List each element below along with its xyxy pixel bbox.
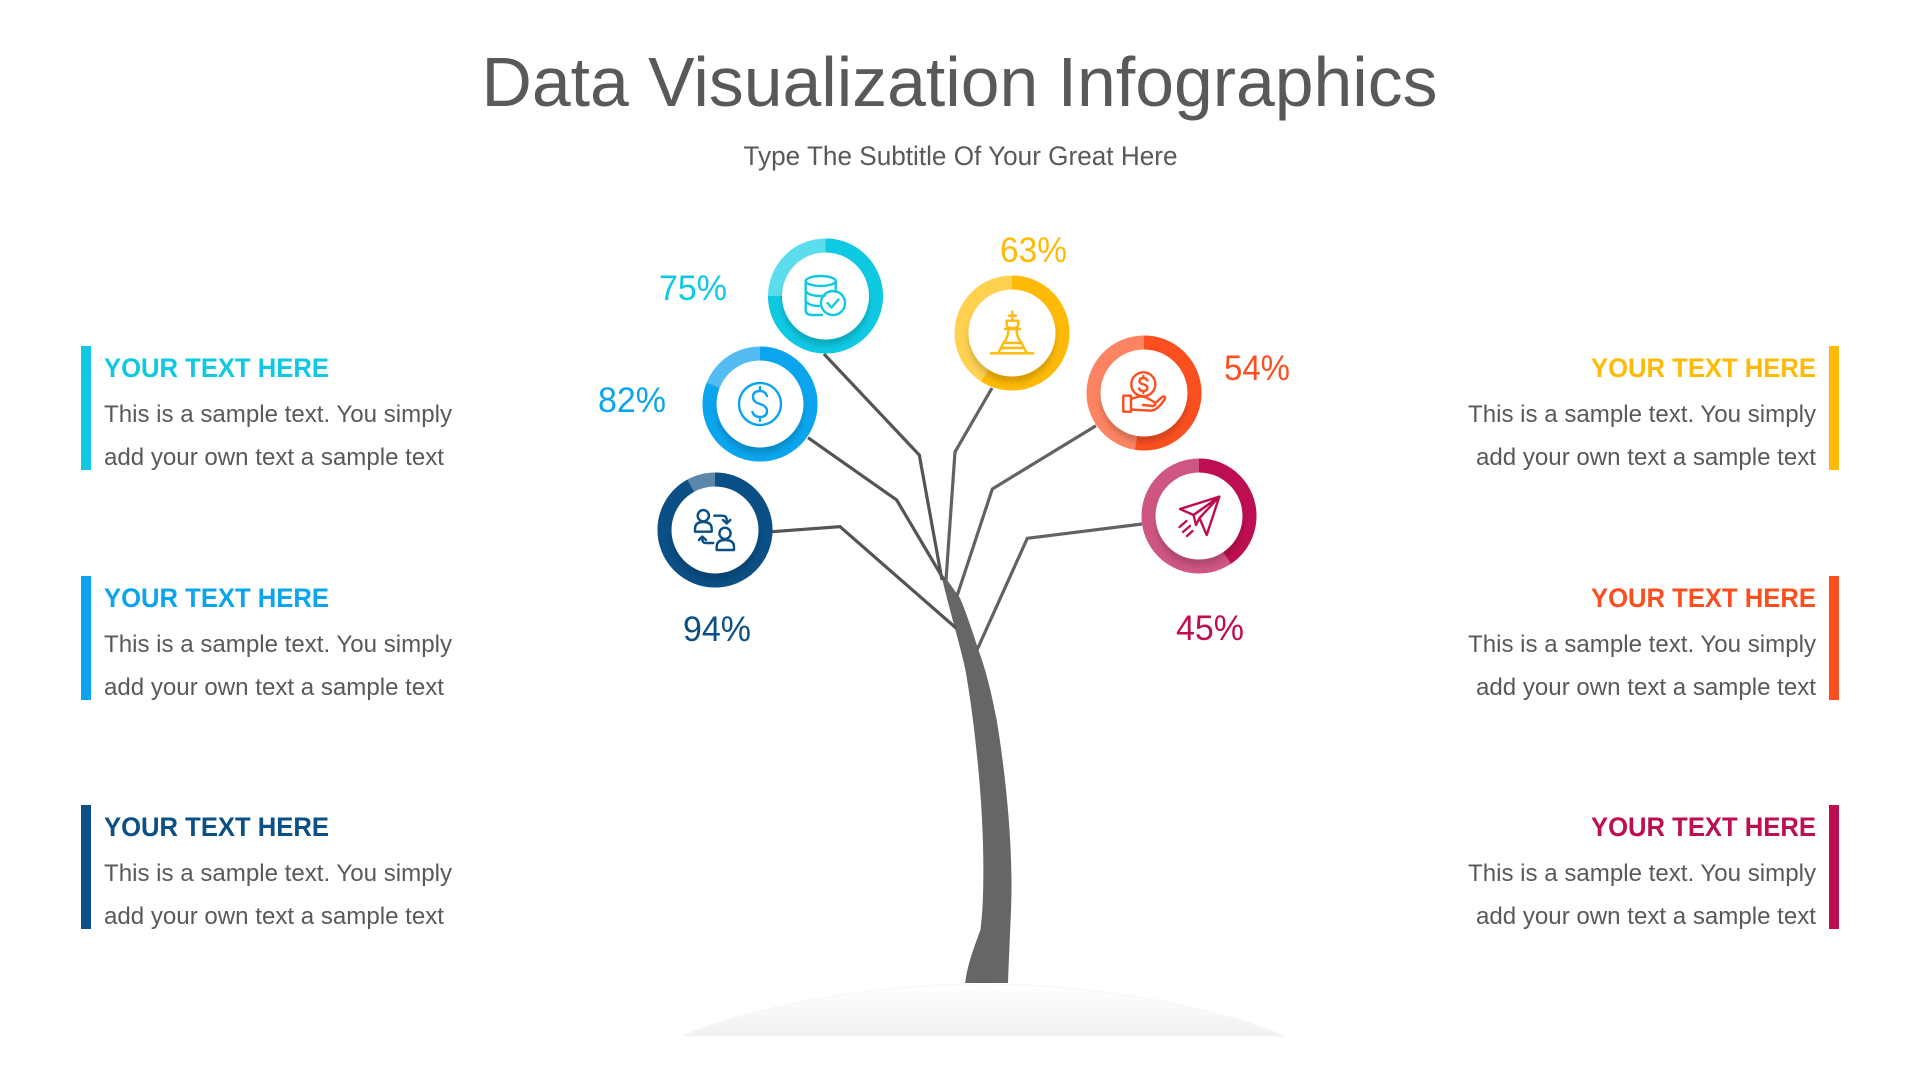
panel: left text block 2: This is a sample text. You simply (104, 631, 452, 658)
label: 63%: 63% (1000, 231, 1067, 270)
panel: right text block 1: This is a sample text. You simply (1468, 401, 1816, 428)
panel: right text block 2 (1468, 576, 1839, 701)
label: 94%: 94% (683, 610, 751, 649)
tree trunk (941, 574, 1012, 983)
panel: right text block 2: YOUR TEXT HERE (1591, 583, 1816, 613)
donut: 94% navy (665, 480, 765, 580)
icon: people exchange (695, 510, 734, 550)
panel: left text block 2: YOUR TEXT HERE (104, 583, 329, 613)
panel: left text block 3: YOUR TEXT HERE (104, 812, 329, 842)
panel: right text block 3: This is a sample text. You simply (1468, 860, 1816, 887)
donut: 54% orange (1094, 343, 1194, 443)
icon: paper plane (1180, 497, 1219, 536)
panel: right text block 1: YOUR TEXT HERE (1591, 353, 1816, 383)
panel: left text block 1: YOUR TEXT HERE (104, 353, 329, 383)
panel: right text block 3 (1468, 805, 1839, 930)
panel: left text block 3 (81, 805, 452, 930)
label: 54%: 54% (1224, 349, 1290, 388)
panel: right text block 3: add your own text a sample text (1476, 903, 1816, 930)
label: 45%: 45% (1176, 609, 1244, 648)
donut: 45% crimson (1149, 466, 1249, 566)
panel: left text block 1: add your own text a sample text (104, 444, 444, 471)
panel: left text block 3: add your own text a sample text (104, 903, 444, 930)
panel: left text block 1 (81, 346, 452, 471)
donut: 75% teal (775, 246, 876, 346)
panel: right text block 1: add your own text a sample text (1476, 444, 1816, 471)
icon: chess king (991, 312, 1033, 353)
subtitle: Type The Subtitle Of Your Great Here (744, 141, 1178, 171)
icon: hand with coin (1123, 372, 1165, 412)
panel: right text block 2: add your own text a sample text (1476, 674, 1816, 701)
panel: right text block 2: This is a sample text. You simply (1468, 631, 1816, 658)
panel: left text block 3: This is a sample text. You simply (104, 860, 452, 887)
icon: dollar coin (739, 383, 781, 425)
ground mound (682, 984, 1285, 1036)
label: 75%: 75% (659, 269, 727, 308)
icon: database check (806, 276, 845, 315)
donut: 63% yellow (962, 283, 1062, 383)
panel: left text block 2 (81, 576, 452, 701)
tree branches (772, 354, 1142, 650)
label: 82%: 82% (598, 381, 666, 420)
panel: right text block 3: YOUR TEXT HERE (1591, 812, 1816, 842)
panel: right text block 1 (1468, 346, 1839, 471)
donut: 82% blue (710, 354, 810, 454)
title: Data Visualization Infographics (482, 43, 1438, 121)
panel: left text block 2: add your own text a sample text (104, 674, 444, 701)
panel: left text block 1: This is a sample text. You simply (104, 401, 452, 428)
